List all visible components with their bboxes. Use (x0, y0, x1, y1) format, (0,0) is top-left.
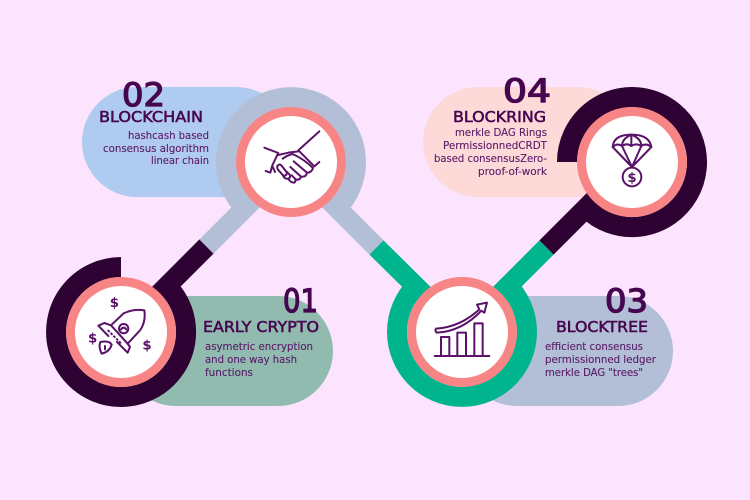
description: blockring: PermissionnedCRDT (443, 141, 548, 152)
description: blockring (434, 128, 548, 178)
icon: rising bar chart (435, 303, 489, 356)
node 04: parachute (567, 97, 697, 227)
description: blocktree: permissionned ledger (545, 355, 657, 366)
description: blocktree (545, 342, 657, 379)
node 02: handshake (226, 97, 356, 217)
number 03: 03 (605, 282, 648, 320)
panel backgrounds (82, 87, 673, 406)
icon: rocket with dollar signs: $ (142, 339, 152, 354)
description: blocktree: merkle DAG "trees" (545, 368, 643, 379)
node 01: rocket (56, 267, 186, 397)
number 02: 02 (122, 76, 165, 114)
icon: parachute with coin: $ (627, 171, 637, 186)
description: blockchain (103, 131, 209, 167)
panel: blocktree pill (462, 296, 673, 406)
text block: 02 blockchain (99, 76, 209, 167)
heading: early crypto: EARLY CRYPTO (203, 319, 319, 336)
heading: blockring: BLOCKRING (453, 109, 546, 126)
description: early crypto: and one way hash (205, 355, 297, 366)
number 01: 01 (283, 282, 318, 320)
text block: 04 blockring (434, 72, 551, 178)
description: early crypto (205, 342, 313, 379)
text block: 01 early crypto (203, 282, 319, 379)
panel: blockchain pill (82, 87, 291, 197)
heading: blockchain: BLOCKCHAIN (99, 109, 203, 126)
icon: rocket with dollar signs: $ (88, 332, 97, 347)
connector path between nodes (121, 162, 632, 332)
description: blockring: proof-of-work (478, 167, 547, 178)
panel: blockring pill (423, 87, 632, 197)
description: blockchain: linear chain (151, 156, 209, 167)
description: early crypto: asymetric encryption (205, 342, 313, 353)
description: blockchain: consensus algorithm (103, 144, 209, 155)
icon: rocket with dollar signs: $ (110, 296, 119, 311)
description: blockring: based consensusZero- (434, 154, 547, 165)
description: early crypto: functions (205, 368, 253, 379)
description: blocktree: efficient consensus (545, 342, 643, 353)
description: blockchain: hashcash based (128, 131, 209, 142)
panel: early crypto pill (121, 296, 333, 406)
description: blockring: merkle DAG Rings (455, 128, 547, 139)
node 03: growth chart (397, 277, 527, 397)
number 04: 04 (503, 72, 551, 110)
heading: blocktree: BLOCKTREE (556, 319, 648, 336)
text block: 03 blocktree (545, 282, 657, 379)
icon: handshake (264, 131, 319, 183)
icon: rocket with dollar signs (88, 296, 152, 354)
